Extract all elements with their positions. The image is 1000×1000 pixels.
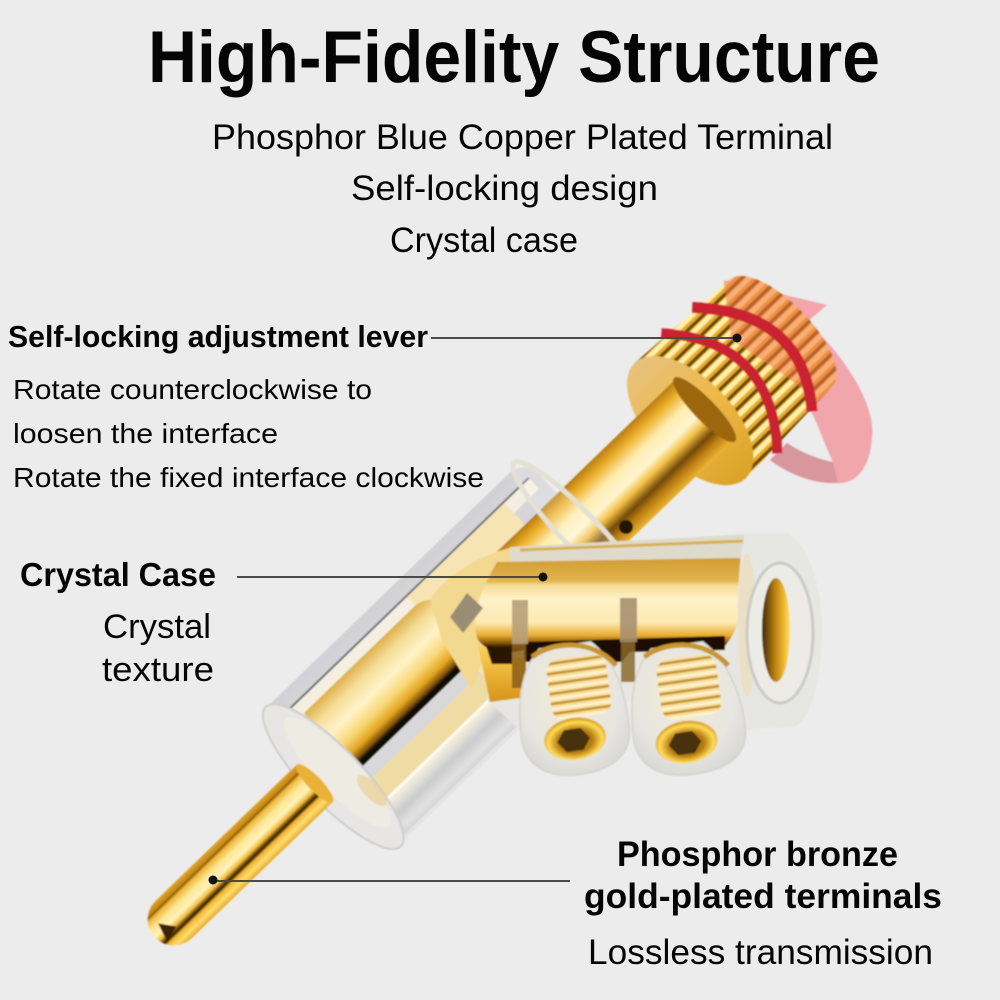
elbow pale gold [430, 548, 520, 690]
subtitle lines: Phosphor Blue Copper Plated Terminal [212, 118, 833, 157]
text block: lever description: Rotate counterclockwise to [13, 374, 372, 405]
T-shaped crystal body [430, 533, 822, 730]
red band 1 [661, 307, 805, 453]
screw terminal right [621, 637, 751, 782]
leader line: lever [431, 337, 737, 339]
callout: crystal case: Crystal Case [20, 556, 216, 593]
pink rotation arrow ribbon [723, 280, 872, 483]
callout: self-locking adjustment lever [8, 319, 742, 354]
crystal tube [259, 459, 657, 852]
title: High-Fidelity Structure [148, 17, 880, 98]
long gold rod up to knob [478, 381, 732, 630]
subtitle lines [212, 118, 833, 260]
screw terminal left [509, 638, 635, 782]
pale interior above the barrel [407, 503, 581, 676]
text block: crystal texture: texture [102, 651, 214, 689]
callout: phosphor bronze terminals: Phosphor bronze [617, 835, 898, 874]
tan stripes [512, 600, 528, 644]
knurled band [635, 255, 858, 478]
text block: lever description: loosen the interface [13, 418, 278, 449]
tube end rim [246, 687, 421, 866]
grey reflection diamond [450, 593, 483, 633]
leader dot: terminal [208, 876, 218, 884]
clear shell [487, 533, 822, 730]
leader line: case [237, 576, 543, 578]
leader dot: case [538, 572, 548, 582]
callout: phosphor bronze terminals [208, 835, 942, 916]
text block: lossless transmission: Lossless transmission [588, 933, 933, 972]
translucent pink overlay on knob [699, 258, 855, 416]
callout: self-locking adjustment lever: Self-locking adjustment lever [8, 319, 428, 354]
gold cross body [475, 558, 743, 653]
callout: phosphor bronze terminals: gold-plated terminals [584, 877, 942, 916]
side dark hole on rod [619, 520, 633, 534]
top clear strip [510, 534, 753, 566]
lower left gold block [478, 645, 526, 702]
leader line: terminal [213, 880, 570, 882]
illustration: banana plug connector [91, 253, 872, 1000]
leader dot: lever [732, 334, 742, 342]
gold pin [137, 760, 338, 956]
knob front face [604, 334, 776, 507]
knob, rotated along the plug axis [602, 253, 861, 510]
pin tip notch [154, 916, 179, 941]
tube top rim [501, 450, 658, 611]
main plug, rotated along its axis [91, 334, 784, 1000]
inner gold barrel [304, 584, 493, 770]
subtitle lines: Crystal case [390, 221, 578, 260]
text block: lever description: Rotate the fixed interface clockwise [13, 462, 484, 493]
subtitle lines: Self-locking design [351, 169, 658, 208]
text block: crystal texture [102, 608, 214, 689]
text block: lever description [13, 374, 484, 493]
dark band below gold [524, 636, 725, 662]
callout: crystal case [20, 556, 548, 593]
rod collar [666, 370, 743, 449]
end cap with hole [738, 533, 822, 727]
red band 2 [692, 278, 833, 421]
text block: crystal texture: Crystal [103, 608, 211, 646]
